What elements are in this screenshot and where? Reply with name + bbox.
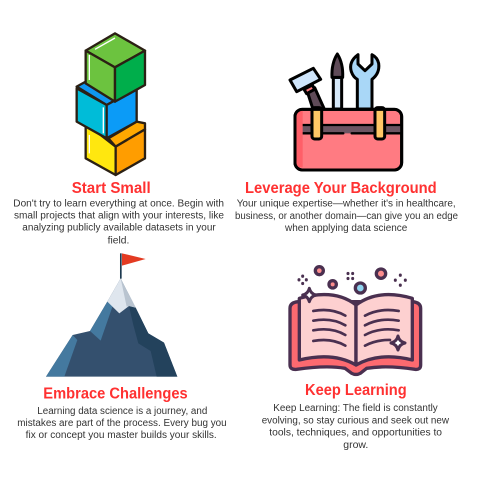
text block: Keep Learning body: evolving, so stay curious and seek out new: [262, 415, 450, 426]
text block: Keep Learning body: [262, 403, 450, 451]
panel: Start Small: [13, 33, 224, 247]
heading: Embrace Challenges: Embrace Challenges: [43, 385, 188, 402]
text block: Leverage Your Background body: business, or another domain—can give you an edge: [235, 211, 458, 222]
text block: Embrace Challenges body: fix or concept you master builds your skills.: [26, 430, 217, 441]
panel: Embrace Challenges: [17, 253, 227, 441]
text block: Embrace Challenges body: Learning data science is a journey, and: [37, 406, 207, 417]
text block: Start Small body: small projects that align with your interests, like: [14, 211, 224, 222]
heading: Keep Learning: Keep Learning: [305, 382, 407, 399]
icon: screwdriver: [332, 54, 343, 109]
heading: Leverage Your Background: Leverage Your Background: [245, 180, 437, 197]
text block: Leverage Your Background body: Your unique expertise—whether it's in healthcare,: [237, 199, 456, 210]
text block: Keep Learning body: Keep Learning: The field is constantly: [273, 403, 438, 414]
icon: open book: [290, 267, 421, 374]
panel: Keep Learning: [262, 267, 450, 451]
text block: Start Small body: analyzing publicly available datasets in your: [22, 223, 216, 234]
panel: Leverage Your Background: [235, 54, 458, 234]
text block: Start Small body: Don't try to learn everything at once. Begin with: [13, 199, 224, 210]
text block: Leverage Your Background body: [235, 199, 458, 234]
text block: Leverage Your Background body: when applying data science: [284, 223, 408, 234]
icon: mountain with flag: [46, 253, 177, 377]
icon: stacked cubes: [77, 33, 145, 175]
icon: hammer: [290, 68, 324, 108]
text block: Start Small body: [13, 199, 224, 247]
icon: toolbox: [290, 54, 402, 170]
heading: Start Small: Start Small: [72, 180, 151, 197]
text block: Embrace Challenges body: [17, 406, 227, 441]
text block: Keep Learning body: tools, techniques, and opportunities to: [269, 428, 442, 439]
text block: Embrace Challenges body: mistakes are part of the process. Every bug you: [17, 418, 227, 429]
text block: Keep Learning body: grow.: [343, 440, 368, 451]
icon: wrench: [351, 55, 379, 109]
text block: Start Small body: field.: [108, 236, 129, 247]
